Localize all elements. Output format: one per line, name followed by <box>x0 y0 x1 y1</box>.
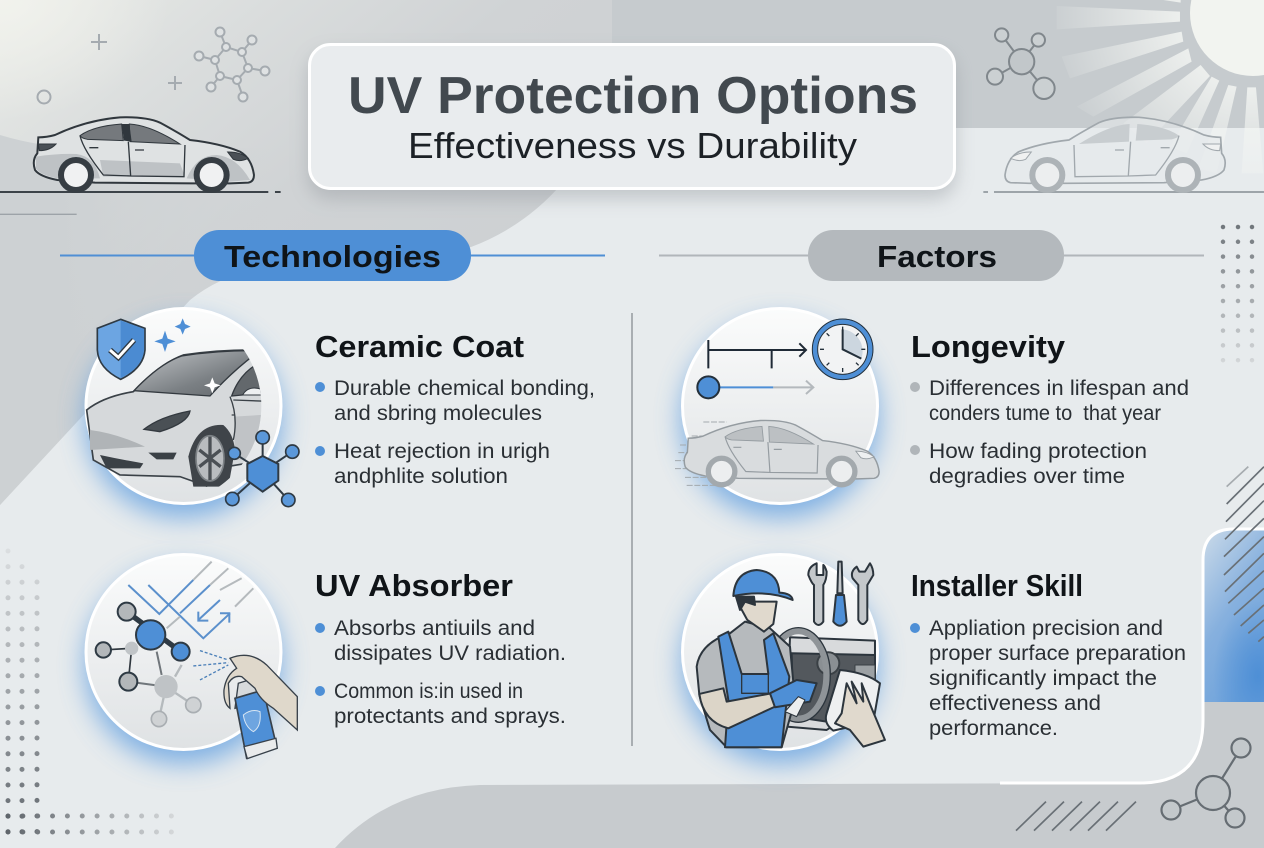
bullet list: Differences in lifespan and <box>929 377 1189 400</box>
dot grid bottom left <box>8 551 172 832</box>
heading: Installer Skill <box>911 568 1083 603</box>
hatching right edge <box>1016 467 1264 831</box>
decorative plus signs, ring and molecule top left <box>38 28 270 104</box>
section header: Factors: Factors <box>877 239 997 274</box>
bullet list: Common is:in used in <box>334 680 523 703</box>
icon: installer cleaning dashboard with tools <box>681 554 885 764</box>
panel: UV Absorber <box>84 554 566 764</box>
bullet list: and sbring molecules <box>334 402 542 425</box>
subtitle: Effectiveness vs Durability <box>408 125 857 166</box>
bullet list: Absorbs antiuils and <box>334 617 535 640</box>
bullet list: performance. <box>929 717 1058 740</box>
icon: hexagon molecule <box>226 431 299 507</box>
bullet list: Heat rejection in urigh <box>334 440 550 463</box>
icon: shield with check <box>97 319 145 379</box>
column divider <box>631 313 633 746</box>
bullet list: degradies over time <box>929 465 1125 488</box>
title: UV Protection Options <box>348 67 918 125</box>
icon: car on road, left <box>0 117 281 214</box>
bullet list: dissipates UV radiation. <box>334 642 566 665</box>
section header: Technologies <box>60 230 605 281</box>
bullet list: significantly impact the <box>929 667 1157 690</box>
bullet list: proper surface preparation <box>929 642 1186 665</box>
bullet list: andphlite solution <box>334 465 508 488</box>
bullet list: How fading protection <box>929 440 1147 463</box>
section header: Technologies: Technologies <box>224 239 441 274</box>
bullet list: protectants and sprays. <box>334 705 566 728</box>
heading: Ceramic Coat <box>315 329 524 364</box>
bullet list <box>315 617 566 728</box>
icon: timeline, clock and fading car <box>675 308 879 518</box>
icon: faded car on road, right <box>983 117 1264 192</box>
panel: Installer Skill <box>681 554 1186 764</box>
dot grid top right <box>1223 227 1252 362</box>
heading: Longevity <box>911 329 1066 364</box>
icon: molecule bottom right <box>1162 738 1250 828</box>
icon: UV rays, molecule and spray bottle <box>84 554 297 764</box>
icon: ceramic coated car <box>84 308 299 518</box>
bullet list <box>910 377 1189 488</box>
icon: sparkles <box>154 318 191 352</box>
bullet list: Durable chemical bonding, <box>334 377 595 400</box>
bullet list: conders tume to that year <box>929 402 1161 425</box>
bullet list <box>315 377 595 488</box>
panel: Ceramic Coat <box>84 308 595 518</box>
heading: UV Absorber <box>315 568 513 603</box>
title panel <box>308 44 956 199</box>
sun with rays <box>1057 0 1264 173</box>
bullet list: Appliation precision and <box>929 617 1163 640</box>
panel: Longevity <box>675 308 1189 518</box>
icon: molecule top right <box>987 28 1055 99</box>
section header: Factors <box>659 230 1204 281</box>
bullet list: effectiveness and <box>929 692 1101 715</box>
bullet list <box>910 617 1186 740</box>
